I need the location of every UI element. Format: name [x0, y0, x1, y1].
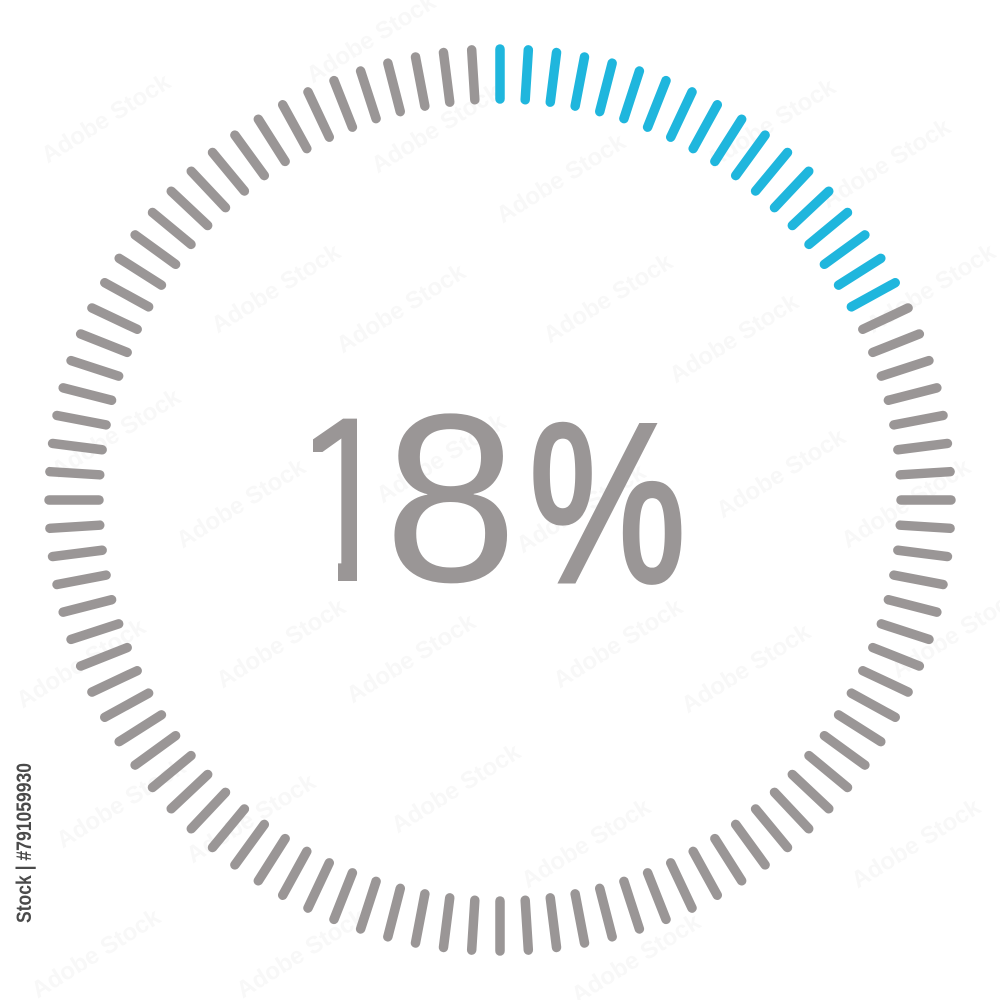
faint stock watermark pattern: Adobe Stock — [862, 238, 1000, 339]
faint stock watermark pattern: Adobe Stock — [37, 68, 176, 169]
faint stock watermark pattern: Adobe Stock — [372, 408, 511, 509]
faint stock watermark pattern: Adobe Stock — [847, 793, 986, 894]
faint stock watermark pattern: Adobe Stock — [342, 608, 481, 709]
faint stock watermark pattern: Adobe Stock — [837, 453, 976, 554]
vertical stock id text: Stock | #791059930 — [13, 763, 36, 923]
faint stock watermark pattern: Adobe Stock — [712, 423, 851, 524]
faint stock watermark pattern: Adobe Stock — [549, 593, 688, 694]
faint stock watermark pattern: Adobe Stock — [172, 453, 311, 554]
center percentage value: 8 — [384, 364, 517, 632]
faint stock watermark pattern: Adobe Stock — [702, 73, 841, 174]
faint stock watermark pattern: Adobe Stock — [367, 78, 506, 179]
faint stock watermark pattern: Adobe Stock — [182, 768, 321, 869]
faint stock watermark pattern: Adobe Stock — [207, 238, 346, 339]
faint stock watermark pattern: Adobe Stock — [492, 128, 631, 229]
center percentage value: % — [529, 377, 686, 629]
faint stock watermark pattern: Adobe Stock — [52, 753, 191, 854]
blue progress ticks (18 of 100) — [500, 49, 895, 307]
center percentage value: 1 — [282, 368, 413, 632]
faint stock watermark pattern: Adobe Stock — [817, 113, 956, 214]
faint stock watermark pattern: Adobe Stock — [387, 738, 526, 839]
faint stock watermark pattern: Adobe Stock — [47, 383, 186, 484]
faint stock watermark pattern: Adobe Stock — [677, 618, 816, 719]
faint stock watermark pattern: Adobe Stock — [665, 288, 804, 389]
faint stock watermark pattern: Adobe Stock — [539, 248, 678, 349]
center percentage value — [313, 413, 682, 585]
faint stock watermark pattern: Adobe Stock — [512, 458, 651, 559]
faint stock watermark pattern: Adobe Stock — [517, 793, 656, 894]
faint stock watermark pattern: Adobe Stock — [332, 258, 471, 359]
faint stock watermark pattern: Adobe Stock — [12, 613, 151, 714]
faint stock watermark pattern: Adobe Stock — [212, 593, 351, 694]
